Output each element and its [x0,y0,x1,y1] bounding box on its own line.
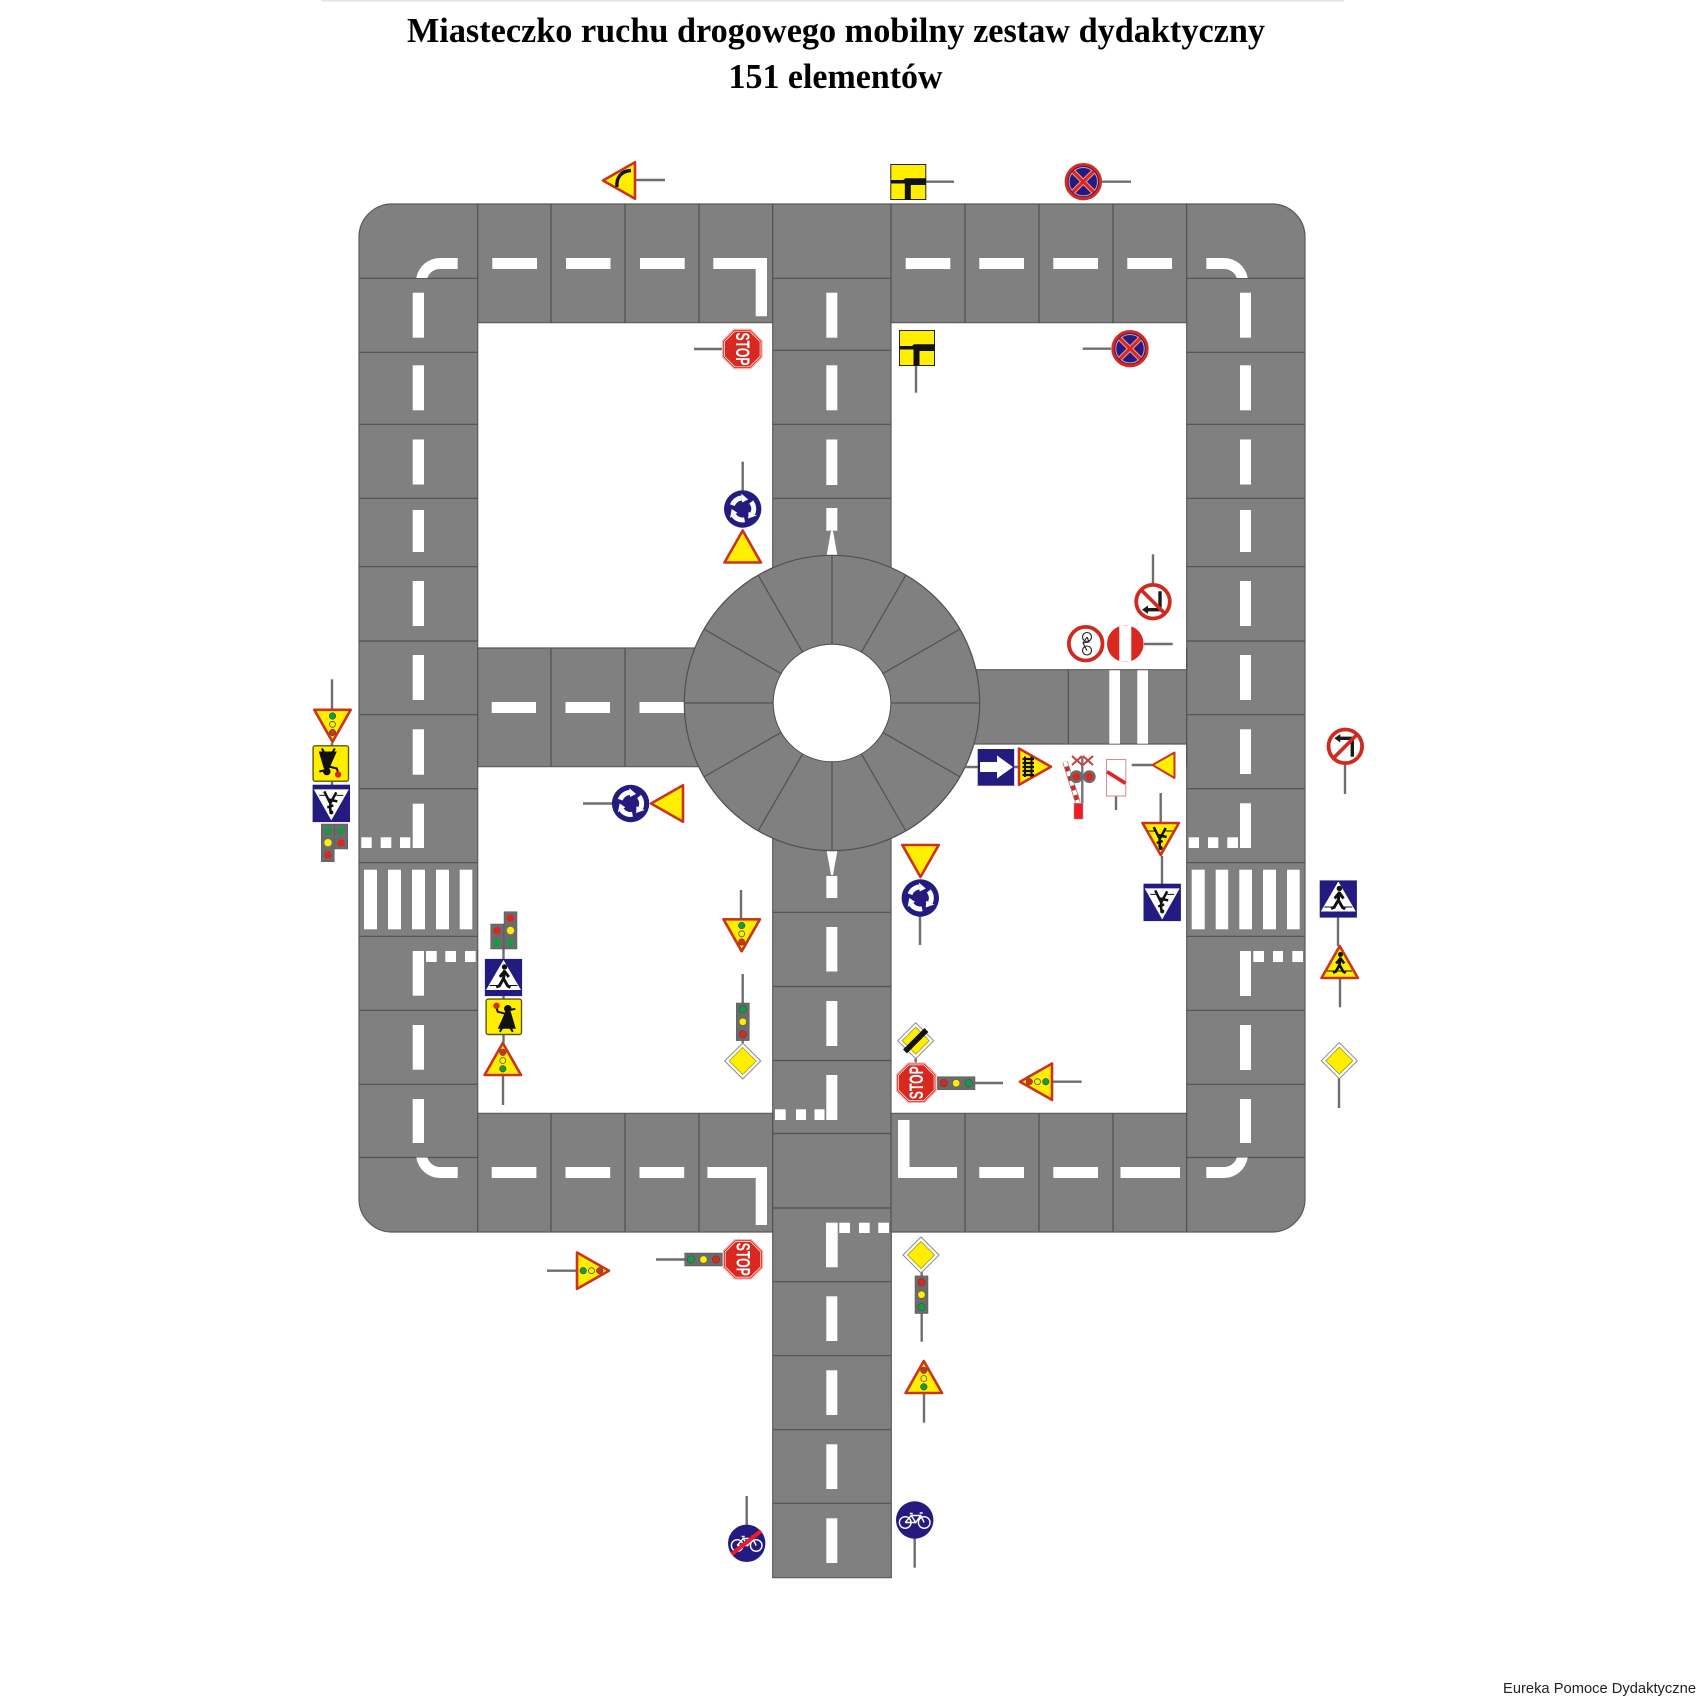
sign stack: left inner block [485,912,522,1105]
icon: one way [978,749,1014,786]
sign: yield and roundabout, south east [902,845,939,945]
sign: yield with figure and blue plate [1142,793,1181,921]
road surface [359,204,1305,1578]
sign: no bicycles and no entry [1069,625,1173,662]
sign: railway barrier with signals [1065,756,1096,819]
sign: no left turn, far right [1328,730,1362,794]
top edge line [321,0,1344,2]
icon: yield with lights [314,710,351,742]
icon: end of priority road [898,1023,934,1059]
icon: traffic lights [491,912,517,949]
sign: one way arrow and railway warning [965,748,1051,786]
sign: lights triangle pointing left [1020,1064,1082,1100]
roundabout [684,555,980,851]
road network [359,204,1305,1578]
sign: pedestrian crossing stack, far right [1320,880,1358,1007]
sign: no stopping, upper right block [1083,332,1147,366]
white road markings [361,258,1303,1563]
icon: railway crossing warning [1019,748,1051,785]
sign: stop, upper left block [694,329,762,369]
sign: end of priority, stop and traffic light group [897,1023,1003,1102]
icon: girl with stop paddle [486,999,522,1034]
icon: traffic lights [321,824,348,862]
sign: dangerous curve, top [603,162,665,199]
sign: traffic light and stop, south west [656,1240,763,1279]
sign: yield with lights, lower left block [724,890,760,951]
icon: no bicycles [1069,627,1102,660]
icon: blue figure plate [313,785,350,822]
icon: yellow figure square [313,746,348,781]
sign: roundabout and yellow triangle, north [724,462,761,562]
icon: horizontal traffic light [937,1077,975,1090]
sign: traffic light and stop, south west: STOP [732,1243,752,1276]
sign stack: far left [313,679,351,862]
sign: road layout T, upper right block [900,330,934,393]
title: Miasteczko ruchu drogowego mobilny zestaw dydaktyczny [407,11,1265,50]
sign: no stopping, top [1066,164,1131,199]
sign: end of cycle path [728,1496,765,1562]
sign: lights warning triangle, south east [906,1361,942,1423]
sign: no left turn, upper right [1136,554,1170,618]
sign: stop, upper left block: STOP [731,332,752,366]
sign: roundabout and yellow triangle, west [583,785,683,822]
sign: lights triangle pointing right [547,1252,609,1289]
title: 151 elementów [728,57,943,96]
sign: priority road and traffic light, south east [903,1237,939,1342]
sign: road layout T, top [891,164,954,200]
sign: priority road, far right [1321,1043,1357,1108]
sign: white plate with red stripe [1106,760,1126,810]
icon: pedestrian crossing [485,959,522,996]
tile joints [359,204,1305,1503]
icon: no entry [1107,625,1144,662]
sign: traffic light and priority road [725,974,761,1079]
icon: lights warning triangle [485,1043,521,1075]
sign: cycle path [896,1501,933,1568]
title [407,11,1265,96]
sign: yellow triangle pointing left [1132,752,1174,778]
icon: stop: STOP [907,1066,928,1099]
